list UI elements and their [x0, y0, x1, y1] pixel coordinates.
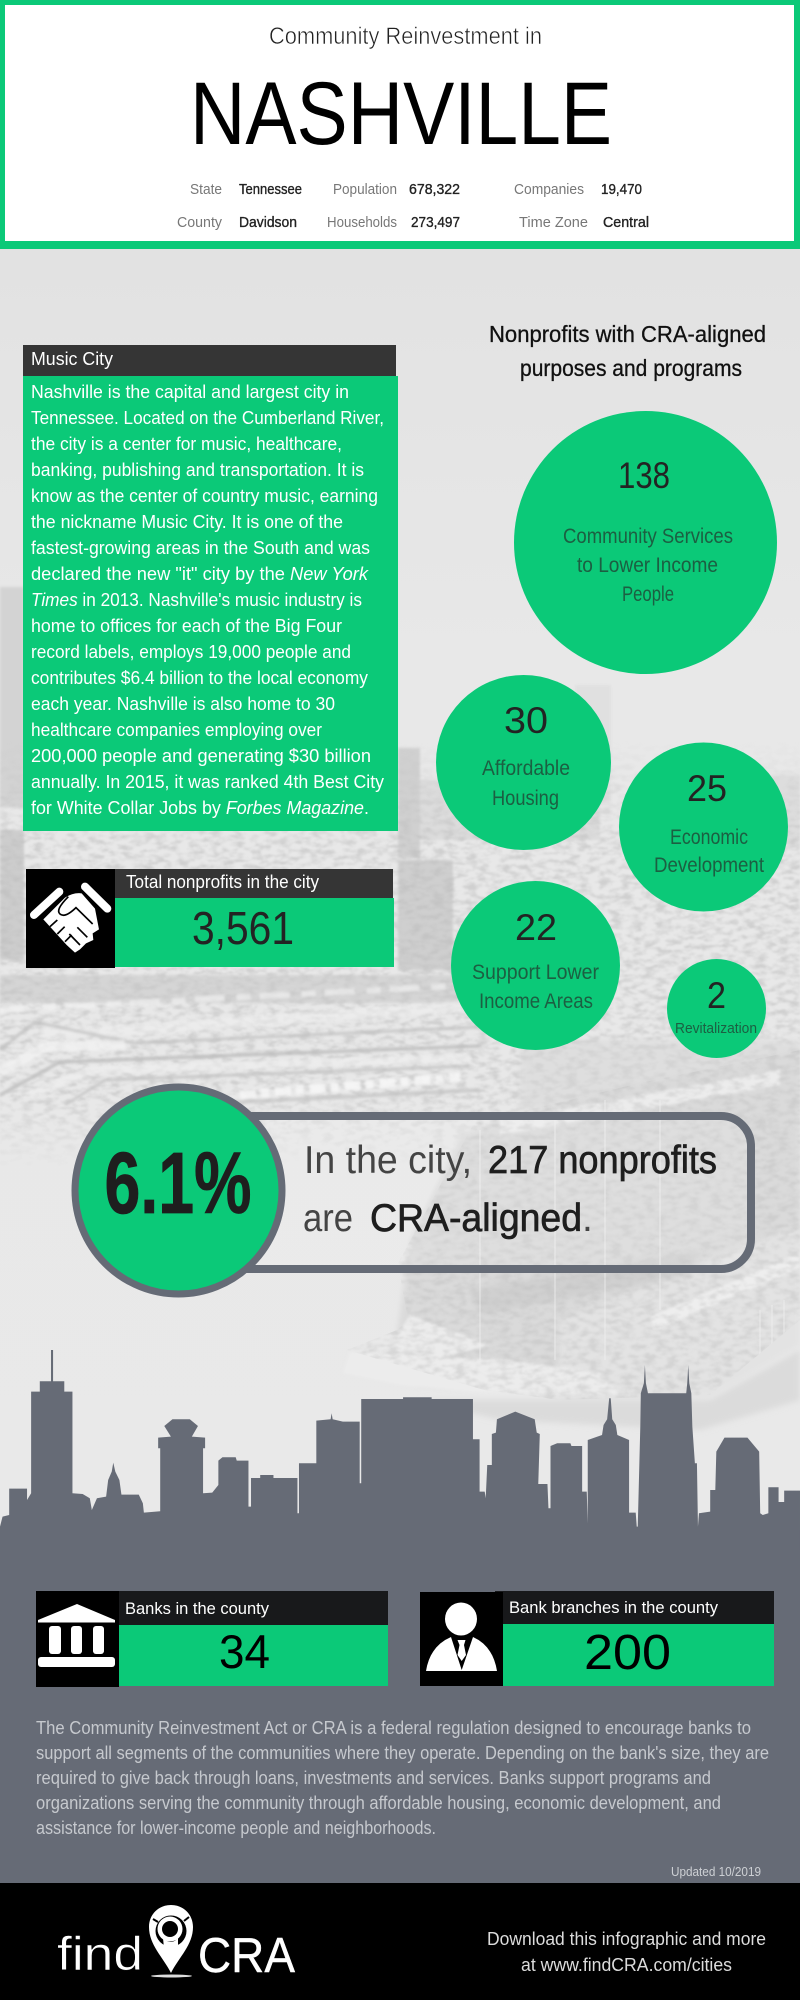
panel heading: Music City	[31, 349, 113, 369]
footer download note: at www.findCRA.com/cities	[521, 1955, 732, 1975]
logo: findCRA: CRA	[198, 1929, 295, 1983]
CRA explanation text: required to give back through loans, investments and services. Banks support programs and	[36, 1768, 711, 1788]
footer download note: Download this infographic and more	[487, 1929, 766, 1949]
header panel	[0, 0, 800, 249]
heading: CRA-aligned nonprofits	[489, 321, 766, 381]
CRA explanation text: The Community Reinvestment Act or CRA is a federal regulation designed to encourage banks to	[36, 1718, 751, 1738]
bubble: support lower income areas: Support Lower	[472, 961, 599, 984]
icon: bank building	[36, 1591, 119, 1687]
callout text	[303, 1139, 717, 1240]
panel body text: Nashville is the capital and largest city in	[31, 382, 349, 402]
city facts: 273,497	[411, 214, 460, 231]
skyline and grey lower panel	[0, 1350, 800, 1890]
panel body text	[23, 376, 398, 831]
callout percentage: 6.1%	[104, 1135, 252, 1232]
city facts: Tennessee	[239, 181, 302, 198]
bubble: revitalization: 2	[707, 975, 726, 1016]
panel body text: declared the new "it" city by the New York	[31, 564, 369, 584]
callout text: are	[303, 1197, 353, 1240]
stat: total nonprofits	[26, 869, 394, 968]
heading: CRA-aligned nonprofits: Nonprofits with CRA-aligned	[489, 321, 766, 347]
bubble: affordable housing: Housing	[492, 787, 559, 810]
updated date: Updated 10/2019	[671, 1865, 761, 1879]
city facts: Population	[333, 181, 397, 198]
logo: findCRA: find	[57, 1927, 143, 1980]
background distant buildings, decorative	[0, 587, 800, 970]
bubble: economic development: Economic	[670, 826, 748, 849]
footer	[0, 1883, 800, 2000]
panel body text: for White Collar Jobs by Forbes Magazine.	[31, 798, 369, 818]
stat: bank branches in the county	[420, 1591, 774, 1686]
callout text: In the city,	[304, 1139, 472, 1182]
city facts: Households	[327, 214, 397, 231]
subtitle: Community Reinvestment in	[269, 23, 542, 50]
city facts: Companies	[514, 181, 584, 198]
background: Nashville riverfront photo	[0, 587, 800, 1428]
stat label: Banks in the county	[125, 1599, 269, 1618]
footer download note	[487, 1929, 766, 1975]
panel body text: banking, publishing and transportation. It is	[31, 460, 364, 480]
panel body text: Times in 2013. Nashville's music industry is	[31, 590, 362, 610]
stat: banks in the county	[36, 1591, 388, 1687]
city facts: Central	[603, 214, 649, 231]
bubble: community services: People	[622, 583, 674, 606]
bubble: support lower income areas	[451, 881, 620, 1050]
city facts: Davidson	[239, 214, 297, 231]
bubble: economic development: Development	[654, 854, 764, 877]
city facts: State	[190, 181, 222, 198]
title: NASHVILLE	[190, 63, 612, 163]
CRA explanation text: assistance for lower-income people and neighborhoods.	[36, 1818, 436, 1838]
heading: CRA-aligned nonprofits: purposes and programs	[520, 355, 742, 381]
stat label: Bank branches in the county	[509, 1598, 718, 1617]
bubble: affordable housing	[436, 675, 611, 850]
panel: Music City	[23, 345, 398, 831]
bubble: support lower income areas: 22	[515, 907, 557, 948]
panel body text: the nickname Music City. It is one of the	[31, 512, 343, 532]
stat value: 3,561	[192, 902, 294, 954]
panel body text: know as the center of country music, earning	[31, 486, 378, 506]
bubble: revitalization: Revitalization	[675, 1020, 757, 1037]
stat label: Total nonprofits in the city	[126, 872, 319, 892]
bubble: economic development: 25	[687, 768, 727, 809]
bubble: community services	[514, 411, 777, 674]
city facts: Time Zone	[519, 214, 588, 231]
city facts: County	[177, 214, 222, 231]
background trees and piers, decorative	[0, 975, 480, 1108]
callout text: 217 nonprofits	[488, 1139, 717, 1182]
background boat shape, decorative	[362, 1072, 800, 1429]
panel body text: 200,000 people and generating $30 billion	[31, 746, 371, 766]
bubble: community services: 138	[618, 455, 670, 496]
stat value: 200	[584, 1626, 671, 1680]
panel body text: Tennessee. Located on the Cumberland River,	[31, 408, 384, 428]
city facts: 19,470	[601, 181, 642, 198]
bubble: community services: to Lower Income	[577, 554, 718, 577]
callout: CRA-aligned share	[75, 1087, 751, 1294]
bubble: affordable housing: Affordable	[482, 757, 570, 780]
bubble: community services: Community Services	[563, 525, 733, 548]
icon: map pin	[149, 1905, 193, 1978]
panel body text: each year. Nashville is also home to 30	[31, 694, 335, 714]
bubble: revitalization	[667, 959, 766, 1058]
icon: banker	[420, 1592, 503, 1686]
icon: handshake	[26, 869, 115, 968]
panel body text: healthcare companies employing over	[31, 720, 322, 740]
CRA explanation text: organizations serving the community through affordable housing, economic development, and	[36, 1793, 721, 1813]
bubble: affordable housing: 30	[504, 700, 548, 741]
panel heading	[23, 345, 396, 376]
panel body text: contributes $6.4 billion to the local economy	[31, 668, 368, 688]
stat value: 34	[219, 1625, 270, 1678]
panel body text: the city is a center for music, healthcare,	[31, 434, 342, 454]
city facts: 678,322	[409, 181, 460, 198]
panel body text: fastest-growing areas in the South and was	[31, 538, 370, 558]
panel body text: record labels, employs 19,000 people and	[31, 642, 351, 662]
panel body text: annually. In 2015, it was ranked 4th Best City	[31, 772, 384, 792]
bubble: economic development	[619, 742, 788, 912]
callout text: CRA-aligned	[370, 1197, 582, 1240]
panel body text: home to offices for each of the Big Four	[31, 616, 342, 636]
callout text: .	[582, 1197, 593, 1240]
logo: findCRA	[57, 1905, 295, 1983]
city facts	[177, 181, 649, 231]
bubble: support lower income areas: Income Areas	[479, 990, 593, 1013]
CRA explanation text	[36, 1718, 769, 1838]
